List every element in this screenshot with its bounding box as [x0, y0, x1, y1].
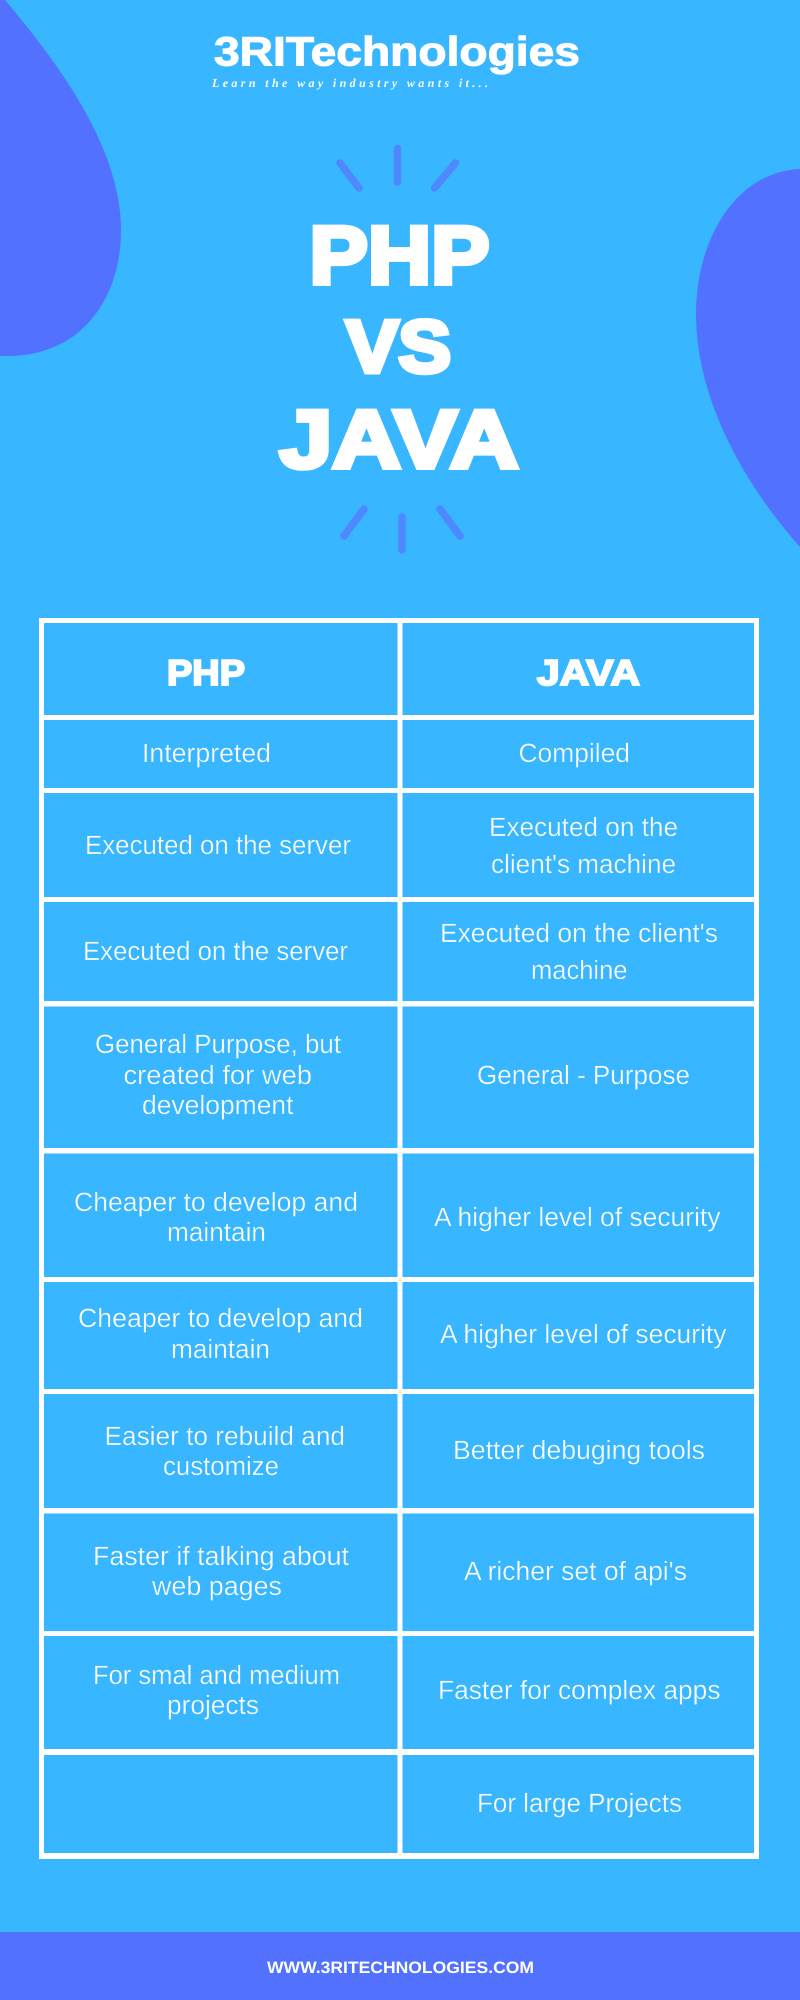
row 7: Easier to rebuild and [104, 1421, 345, 1451]
decorative blob: right [696, 169, 800, 547]
row 1: Interpreted [142, 738, 271, 768]
row 7: Better debuging tools [453, 1435, 705, 1465]
icon: bottom burst rays [344, 509, 460, 550]
row 3 [83, 918, 718, 985]
footer bar [0, 1932, 800, 2000]
row 7 [104, 1421, 705, 1481]
row 8 [93, 1541, 687, 1601]
row 5 [74, 1187, 721, 1247]
row 3: machine [531, 955, 628, 985]
table header [167, 652, 640, 693]
row 8: web pages [151, 1571, 282, 1601]
row 4: General - Purpose [477, 1060, 690, 1090]
row 2: client's machine [491, 849, 676, 879]
row 4: created for web [124, 1060, 312, 1090]
row 6: Cheaper to develop and [78, 1303, 363, 1333]
table header: PHP [167, 652, 245, 693]
row 9 [93, 1660, 720, 1720]
comparison table [39, 618, 759, 1859]
row 4 [95, 1029, 690, 1120]
row 1 [142, 738, 630, 768]
footer url: WWW.3RITECHNOLOGIES.COM [267, 1959, 534, 1977]
row 3: Executed on the server [83, 936, 348, 966]
row 8: Faster if talking about [93, 1541, 350, 1571]
title: JAVA [280, 394, 518, 486]
tagline: Learn the way industry wants it... [211, 76, 488, 90]
table grid [39, 618, 759, 1859]
row 7: customize [163, 1451, 279, 1481]
row 6: maintain [171, 1334, 270, 1364]
title: VS [346, 305, 451, 388]
row 5: A higher level of security [434, 1202, 721, 1232]
row 4: General Purpose, but [95, 1029, 342, 1059]
row 3: Executed on the client's [440, 918, 718, 948]
table header: JAVA [537, 652, 640, 693]
title: PHP [310, 210, 490, 302]
icon: top burst rays [340, 148, 456, 188]
row 9: Faster for complex apps [438, 1675, 720, 1705]
decorative blob: left [0, 0, 121, 356]
logo: company name: 3RITechnologies [214, 28, 580, 74]
title [280, 210, 518, 486]
row 6 [78, 1303, 727, 1364]
row 2 [85, 812, 678, 879]
row 5: Cheaper to develop and [74, 1187, 358, 1217]
row 2: Executed on the server [85, 830, 351, 860]
row 4: development [142, 1090, 294, 1120]
row 9: projects [167, 1690, 259, 1720]
row 6: A higher level of security [440, 1319, 727, 1349]
row 5: maintain [167, 1217, 266, 1247]
row 9: For smal and medium [93, 1660, 340, 1690]
row 10: For large Projects [477, 1788, 682, 1818]
row 1: Compiled [518, 738, 630, 768]
row 8: A richer set of api's [464, 1556, 687, 1586]
row 2: Executed on the [489, 812, 678, 842]
